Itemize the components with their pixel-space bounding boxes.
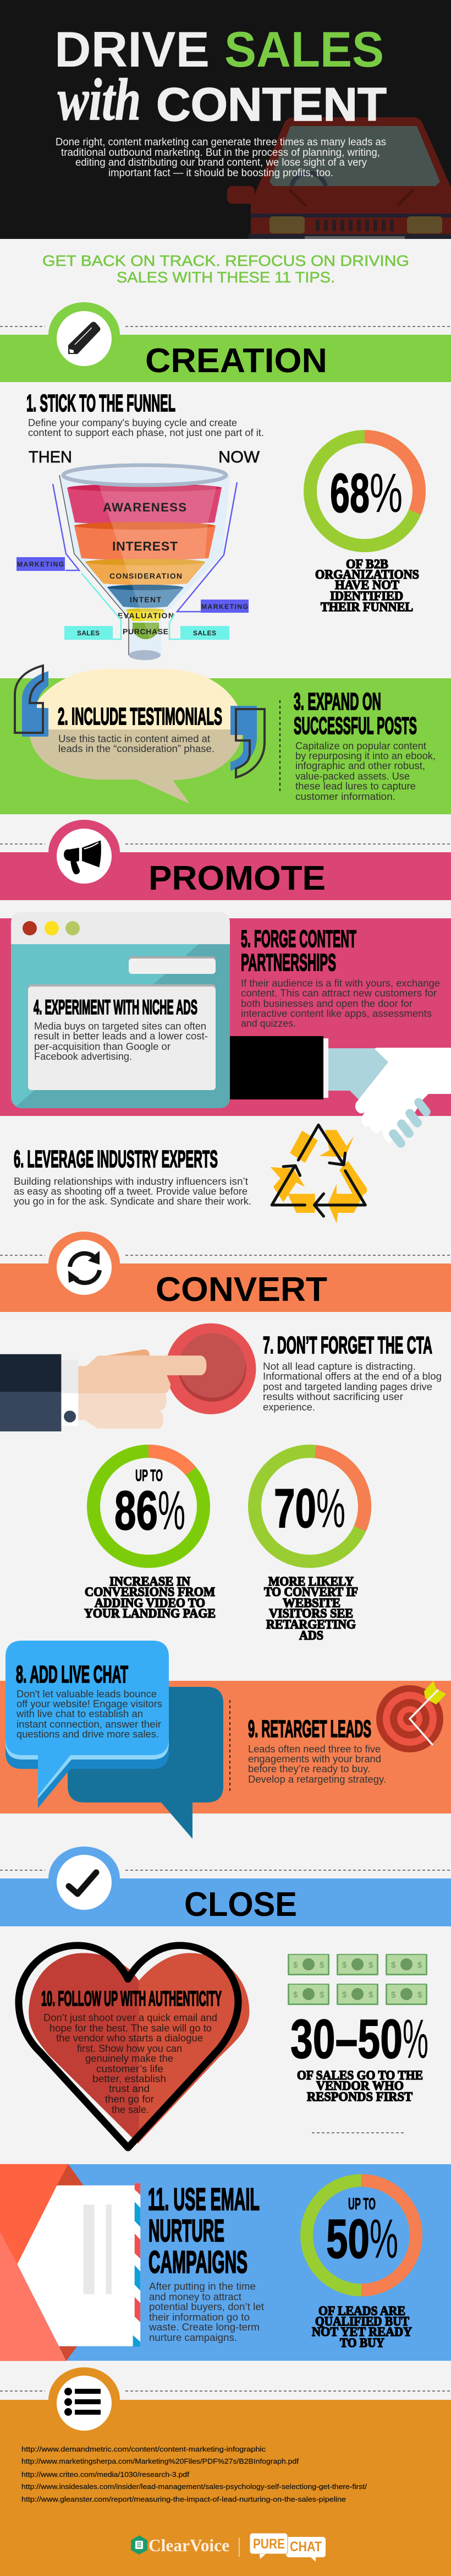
stat: up to 50 percent: % [370, 2208, 398, 2270]
text: retarget leads: Develop a retargeting strategy. [248, 1774, 386, 1785]
browser window: experiment with niche ads [11, 912, 230, 1108]
funnel diagram [16, 448, 260, 660]
stat: 68 percent: HAVE NOT [335, 578, 399, 592]
stat: 68 percent: % [370, 462, 403, 524]
text: use email nurture campaigns: 11. USE EMAIL [148, 2182, 260, 2217]
stat: 30 to 50 percent: 30–50 [290, 2008, 403, 2070]
stat: 30 to 50 percent: OF SALES GO TO THE [297, 2068, 423, 2082]
text: expand on successful posts: customer information. [295, 791, 395, 802]
browser window: experiment with niche ads: result in better leads and a lower cost- [34, 1031, 208, 1042]
text: forge content partnerships: and quizzes. [241, 1018, 296, 1029]
heart: follow up with authenticity: Don’t just shoot over a quick email and [43, 2012, 217, 2023]
stat: up to 86 percent: 86 [114, 1480, 158, 1542]
text: use email nurture campaigns [148, 2182, 264, 2343]
icon: right quote mark [230, 706, 265, 777]
source links: http://www.criteo.com/media/1030/research-3.pdf [21, 2470, 189, 2479]
text: forge content partnerships: PARTNERSHIPS [241, 949, 336, 976]
icon: dollar bills [288, 1954, 427, 2005]
tip 1: stick to the funnel: 1. STICK TO THE FUNNEL [26, 390, 175, 417]
tip 6: leverage industry experts [14, 1146, 251, 1207]
heading: convert: CONVERT [156, 1271, 327, 1309]
stat: 70 percent: MORE LIKELY [268, 1575, 354, 1588]
funnel diagram: THEN [29, 448, 72, 466]
stat: 70 percent: 70 [274, 1478, 316, 1539]
logo: pure chat: PURE [253, 2536, 285, 2552]
tip 7: don't forget the cta: experience. [263, 1402, 315, 1413]
icon: left quote mark [15, 666, 48, 737]
title [54, 22, 387, 133]
tip 6: leverage industry experts: you go in for the ask. Syndicate and share their work. [14, 1196, 251, 1207]
source links: http://www.insidesales.com/insider/lead-management/sales-psychology-self-selectiong-get-there-first/ [21, 2482, 367, 2491]
text: retarget leads [248, 1715, 386, 1785]
stat: 68 percent: THEIR FUNNEL [321, 600, 413, 614]
stat: up to 86 percent: ADDING VIDEO TO [95, 1596, 205, 1610]
icon: list [64, 2388, 101, 2416]
funnel diagram: SALES [193, 629, 216, 637]
stat: up to 86 percent: CONVERSIONS FROM [85, 1585, 215, 1599]
logo: pure chat: CHAT [290, 2539, 322, 2555]
text: use email nurture campaigns: potential buyers, don’t let [149, 2301, 264, 2312]
stat: up to 50 percent: NOT YET READY [312, 2325, 412, 2339]
stat: 70 percent: RETARGETING [266, 1618, 356, 1631]
text: use email nurture campaigns: After putting in the time [149, 2281, 256, 2292]
logo: clearvoice: ClearVoice [148, 2535, 229, 2555]
browser window: experiment with niche ads: 4. EXPERIMENT WITH NICHE ADS [34, 996, 197, 1019]
stat: 68 percent: ORGANIZATIONS [315, 568, 419, 581]
text: forge content partnerships: If their audience is a fit with yours, exchange [241, 978, 440, 989]
intro paragraph: editing and distributing our brand content, we lose sight of a very [75, 157, 367, 168]
text: forge content partnerships [241, 925, 440, 1029]
live chat bubble: with live chat to establish an [16, 1708, 143, 1719]
tip 6: leverage industry experts: as easy as shooting off a tweet. Provide value before [14, 1186, 248, 1197]
illustration: red car [227, 117, 451, 239]
browser window: experiment with niche ads: per-acquisition than Google or [34, 1041, 170, 1052]
title: CONTENT [156, 79, 387, 131]
tip 1: stick to the funnel [26, 390, 264, 438]
icon: megaphone [64, 841, 101, 874]
speech bubble: include testimonials [29, 669, 243, 804]
stat: up to 50 percent: 50 [326, 2208, 370, 2270]
source links: http://www.demandmetric.com/content/content-marketing-infographic [21, 2445, 266, 2453]
funnel diagram: INTENT [130, 595, 161, 604]
tip 7: don't forget the cta [263, 1332, 442, 1413]
section header: convert [0, 1232, 451, 1312]
stat: up to 50 percent: TO BUY [340, 2336, 384, 2350]
text: use email nurture campaigns: their information go to [149, 2312, 250, 2323]
stat: 30 to 50 percent: % [403, 2008, 428, 2070]
header panel [0, 0, 451, 239]
tip 7: don't forget the cta: Informational offers at the end of a blog [263, 1371, 442, 1382]
funnel diagram: SALES [77, 629, 100, 637]
stat: up to 86 percent: INCREASE IN [109, 1575, 190, 1588]
text: expand on successful posts: value-packed assets. Use [295, 771, 410, 782]
tagline: GET BACK ON TRACK. REFOCUS ON DRIVING [42, 252, 409, 269]
stat: up to 86 percent: % [158, 1480, 185, 1542]
panel: sources footer [0, 2367, 451, 2576]
tagline [42, 252, 409, 286]
stat: 70 percent: ADS [299, 1629, 323, 1642]
dark speech bubble [68, 1687, 223, 1839]
heart: follow up with authenticity: the sale. [112, 2104, 149, 2115]
text: expand on successful posts: by repurposing it into an ebook, [295, 750, 436, 761]
live chat bubble [6, 1641, 169, 1808]
live chat bubble: 8. ADD LIVE CHAT [16, 1661, 128, 1688]
stat: 68 percent: IDENTIFIED [330, 589, 403, 603]
icon: pencil [68, 322, 100, 354]
intro paragraph: traditional outbound marketing. But in the process of planning, writing, [61, 147, 380, 159]
live chat bubble: instant connection, answer their [16, 1719, 161, 1730]
heart: follow up with authenticity: genuinely make the [85, 2053, 173, 2064]
text: use email nurture campaigns: CAMPAIGNS [148, 2245, 248, 2280]
stat: 30 to 50 percent [290, 2008, 428, 2104]
speech bubble: include testimonials: leads in the “consideration” phase. [58, 743, 215, 754]
stat: up to 86 percent [84, 1451, 216, 1620]
heart: follow up with authenticity: first. Show how you can [77, 2043, 182, 2054]
live chat bubble: questions and drive more sales. [16, 1729, 159, 1740]
heading: promote: PROMOTE [148, 859, 326, 897]
tagline: SALES WITH THESE 11 TIPS. [117, 269, 335, 286]
text: retarget leads: Leads often need three to five [248, 1744, 381, 1755]
intro paragraph [56, 137, 386, 179]
speech bubble: include testimonials: 2. INCLUDE TESTIMONIALS [58, 703, 222, 730]
browser window: experiment with niche ads: Facebook advertising. [34, 1051, 132, 1062]
stat: 70 percent: WEBSITE [283, 1596, 340, 1610]
heart: follow up with authenticity: then go for [105, 2094, 154, 2105]
text: retarget leads: engagements with your brand [248, 1753, 381, 1764]
text: forge content partnerships: interactive content like apps, assessments [241, 1008, 432, 1019]
heart: follow up with authenticity: better, establish [92, 2073, 166, 2084]
source links: http://www.marketingsherpa.com/Marketing%20Files/PDF%27s/B2BInfograph.pdf [21, 2457, 299, 2465]
stat: 30 to 50 percent: RESPONDS FIRST [307, 2090, 413, 2104]
heart: follow up with authenticity: the vendor who starts a dialogue [56, 2033, 203, 2044]
stat: up to 86 percent: UP TO [135, 1467, 163, 1485]
icon: target with arrow [376, 1681, 446, 1752]
live chat bubble: Don't let valuable leads bounce [16, 1689, 157, 1700]
stat: 70 percent: % [316, 1478, 345, 1539]
panel: tips 8 and 9 [0, 1641, 451, 1839]
tip 7: don't forget the cta: Not all lead capture is distracting. [263, 1361, 416, 1372]
stat: up to 50 percent: UP TO [348, 2195, 376, 2213]
stat: 30 to 50 percent: VENDOR WHO [316, 2079, 404, 2093]
logo: pure chat [250, 2533, 326, 2562]
source links: http://www.gleanster.com/report/measuring-the-impact-of-lead-nurturing-on-the-sales-pipeline [21, 2495, 346, 2503]
funnel diagram: MARKETING [201, 603, 248, 611]
heart: follow up with authenticity: 10. FOLLOW UP WITH AUTHENTICITY [41, 1987, 222, 2011]
speech bubble: include testimonials: Use this tactic in content aimed at [58, 733, 210, 744]
funnel diagram: NOW [218, 448, 260, 466]
stat: 70 percent: VISITORS SEE [269, 1606, 353, 1620]
panel: tips 4 and 5 [0, 912, 451, 1116]
illustration: envelope [0, 2164, 140, 2361]
heart: follow up with authenticity: hope for the best. The sale will go to [50, 2023, 212, 2034]
section header: close [0, 1847, 451, 1926]
funnel diagram: EVALUATION [118, 611, 174, 620]
stat: up to 86 percent: YOUR LANDING PAGE [84, 1606, 216, 1620]
text: expand on successful posts: these lead lures to capture [295, 781, 416, 792]
text: forge content partnerships: both businesses and open the door for [241, 998, 413, 1009]
tip 6: leverage industry experts: 6. LEVERAGE INDUSTRY EXPERTS [14, 1146, 218, 1173]
funnel diagram: AWARENESS [103, 500, 186, 514]
text: retarget leads: before they’re ready to buy. [248, 1763, 370, 1774]
illustration: finger pressing button [0, 1324, 256, 1431]
source links [21, 2445, 367, 2503]
text: expand on successful posts: Capitalize on popular content [295, 740, 426, 751]
stat: 68 percent: OF B2B [346, 557, 388, 571]
stat: up to 50 percent: OF LEADS ARE [318, 2304, 405, 2318]
illustration: handshake [230, 1036, 451, 1150]
tip 6: leverage industry experts: Building relationships with industry influencers isn’t [14, 1176, 248, 1187]
live chat bubble: off your website! Engage visitors [16, 1698, 162, 1709]
tip 1: stick to the funnel: content to support each phase, not just one part of it. [28, 427, 264, 438]
heart: follow up with authenticity: trust and [109, 2083, 150, 2094]
panel: tips 2 and 3 [0, 666, 451, 814]
stat: 68 percent [310, 437, 419, 614]
stat: 68 percent: 68 [330, 462, 370, 524]
icon: refresh arrows [68, 1251, 100, 1283]
tip 1: stick to the funnel: Define your company's buying cycle and create [28, 417, 237, 428]
funnel diagram: CONSIDERATION [109, 571, 182, 580]
tip 7: don't forget the cta: post and targeted landing pages drive [263, 1381, 432, 1392]
funnel diagram: PURCHASE [123, 627, 168, 636]
tip 7: don't forget the cta: results without sacrificing user [263, 1391, 403, 1402]
section header: creation [0, 302, 451, 382]
title: SALES [224, 22, 384, 78]
funnel diagram: INTEREST [112, 539, 178, 553]
intro paragraph: Done right, content marketing can generate three times as many leads as [56, 137, 386, 148]
heading: creation: CREATION [145, 342, 327, 380]
heart: follow up with authenticity [19, 1946, 249, 2148]
panel: tip 11 [0, 2164, 451, 2361]
heading: close: CLOSE [184, 1886, 297, 1924]
text: use email nurture campaigns: NURTURE [148, 2213, 224, 2248]
stat: up to 50 percent: QUALIFIED BUT [315, 2314, 409, 2328]
title: with [58, 67, 141, 133]
funnel diagram: MARKETING [17, 560, 64, 568]
text: forge content partnerships: content. This can attract new customers for [241, 988, 437, 999]
text: expand on successful posts: infographic and other robust, [295, 760, 425, 771]
title: DRIVE [54, 22, 210, 78]
stat: 70 percent [255, 1451, 365, 1642]
text: use email nurture campaigns: and money to attract [149, 2291, 241, 2302]
icon: check mark [69, 1872, 96, 1894]
text: use email nurture campaigns: waste. Create long-term [148, 2322, 260, 2333]
text: expand on successful posts [294, 688, 436, 802]
stat: up to 50 percent [307, 2180, 416, 2350]
stat: 70 percent: TO CONVERT IF [264, 1585, 358, 1599]
text: use email nurture campaigns: nurture campaigns. [149, 2332, 237, 2343]
browser window: experiment with niche ads: Media buys on targeted sites can often [34, 1021, 206, 1032]
section header: promote [0, 820, 451, 900]
icon: recycle triangle [271, 1125, 367, 1223]
heart: follow up with authenticity: customer’s life [96, 2063, 163, 2074]
intro paragraph: important fact — it should be boosting profits, too. [108, 167, 333, 179]
